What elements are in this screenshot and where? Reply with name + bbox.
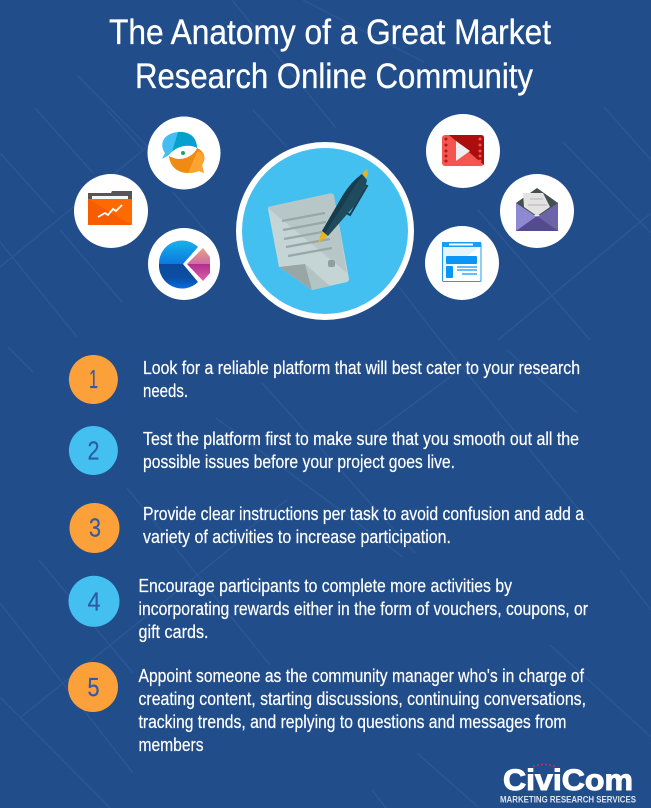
title — [109, 13, 551, 96]
step 5 text: tracking trends, and replying to questions and messages from — [138, 712, 566, 732]
step 3 — [70, 503, 585, 553]
icon: video player — [426, 114, 500, 188]
number badge 1 — [69, 355, 118, 404]
step 2 text: possible issues before your project goes live. — [143, 452, 455, 472]
icon: folder with chart — [74, 174, 148, 248]
number badge 3 — [70, 503, 120, 553]
step 1 — [69, 355, 580, 404]
number badge 3: 3 — [89, 512, 101, 542]
step 5 text: creating content, starting discussions, continuing conversations, — [138, 689, 586, 709]
icon: pie chart — [148, 228, 220, 300]
document sheet — [268, 193, 349, 290]
step 5 text: Appoint someone as the community manager who's in charge of — [138, 666, 585, 686]
step 5 text — [138, 666, 586, 755]
number badge 1: 1 — [89, 364, 98, 394]
step 3 text: variety of activities to increase participation. — [143, 527, 451, 547]
number badge 4: 4 — [88, 586, 100, 616]
icon: open envelope — [500, 174, 574, 248]
number badge 2 — [69, 426, 118, 475]
number badge 4 — [68, 576, 120, 627]
title: The Anatomy of a Great Market — [109, 13, 551, 52]
step 1 text: needs. — [143, 381, 188, 401]
step 4 — [68, 576, 588, 642]
number badge 5 — [68, 662, 118, 712]
step 3 text: Provide clear instructions per task to avoid confusion and add a — [143, 504, 585, 524]
step 1 text — [143, 358, 580, 401]
icon: chat bubbles with eye — [148, 116, 220, 190]
pen — [318, 169, 368, 243]
step 4 text: Encourage participants to complete more activities by — [138, 576, 512, 596]
icon: document and pen — [236, 142, 414, 320]
step 4 text: incorporating rewards either in the form of vouchers, coupons, or — [138, 599, 588, 619]
logo: Civicom: CiviCom — [503, 764, 633, 797]
step 2 text — [143, 429, 579, 472]
title: Research Online Community — [135, 57, 533, 96]
step 5 — [68, 662, 586, 755]
icon: browser window — [425, 226, 499, 300]
number badge 5: 5 — [88, 672, 100, 702]
step 5 text: members — [138, 735, 204, 755]
step 1 text: Look for a reliable platform that will best cater to your research — [143, 358, 580, 378]
step 4 text: gift cards. — [138, 622, 208, 642]
step 2 text: Test the platform first to make sure that you smooth out all the — [143, 429, 579, 449]
step 4 text — [138, 576, 588, 642]
step 3 text — [143, 504, 585, 547]
number badge 2: 2 — [88, 436, 100, 466]
step 2 — [69, 426, 579, 475]
